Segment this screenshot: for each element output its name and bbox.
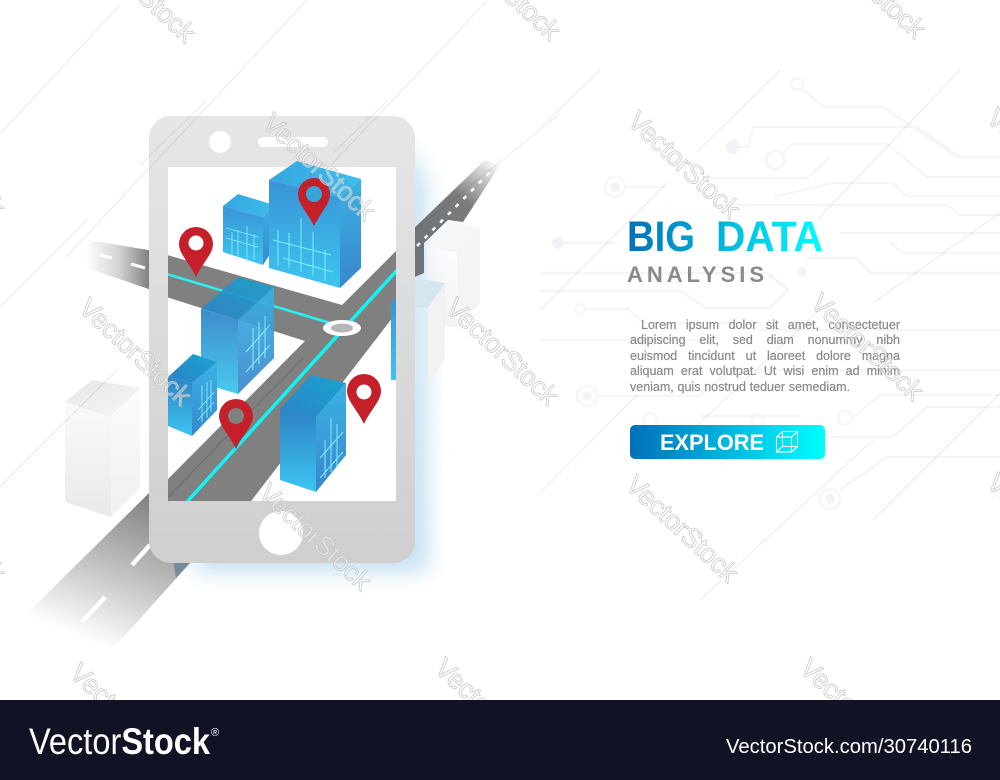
- body paragraph: Lorem ipsum dolor sit amet, consectetuer: [641, 318, 900, 332]
- watermark overlay: VectorStock: [805, 287, 930, 407]
- building: small rear: [223, 194, 274, 265]
- phone body: [149, 116, 415, 563]
- city map on screen: [160, 161, 400, 505]
- building: ghost right rear: [427, 222, 480, 327]
- pin: top building: [298, 178, 330, 226]
- road: upper right with dashes: [410, 160, 500, 279]
- building: middle: [201, 277, 274, 394]
- body paragraph: aliquam erat volutpat. Ut wisi enim ad minim: [630, 364, 900, 378]
- watermark overlay: VectorStock: [620, 469, 745, 589]
- pin: right: [347, 374, 381, 424]
- heading: analysis: ANALYSIS: [627, 262, 764, 287]
- pin: centre road: [219, 399, 253, 449]
- pin: left road: [179, 227, 213, 277]
- road: lower left: [0, 493, 200, 650]
- body paragraph: adipiscing elit, sed diam nonummy nibh: [630, 333, 900, 347]
- screen: [168, 167, 396, 501]
- building: front left: [168, 354, 217, 436]
- roads on screen: [160, 247, 400, 505]
- building: ghost right front: [410, 277, 445, 385]
- main illustration canvas: [34, 77, 1000, 642]
- button label: EXPLORE: [660, 430, 764, 455]
- footer image id: VectorStock.com/30740116: [726, 736, 972, 758]
- watermark overlay: VectorStock: [257, 107, 382, 227]
- building: clipped right edge: [391, 298, 396, 380]
- watermark overlay: VectorStock: [622, 105, 747, 225]
- camera: [209, 131, 231, 153]
- heading: big data: [627, 213, 823, 261]
- building: tall rear: [269, 161, 361, 288]
- body paragraph: euismod tincidunt ut laoreet dolore magna: [630, 349, 900, 363]
- watermark overlay: VectorStock: [253, 477, 378, 597]
- heading: big data: BIG: [627, 213, 695, 261]
- phone blue shadow: [195, 135, 428, 572]
- registered mark: ®: [211, 727, 219, 739]
- building: front right: [280, 375, 346, 492]
- watermark overlay: VectorStock: [440, 292, 565, 412]
- speaker: [258, 137, 328, 147]
- body paragraph: veniam, quis nostrud teduer semediam.: [630, 380, 850, 394]
- building: ghost left: [65, 380, 140, 517]
- footer bar: [0, 700, 1000, 780]
- icon: cube: [776, 432, 798, 452]
- body paragraph: [630, 318, 900, 394]
- watermark overlay: VectorStock: [73, 292, 198, 412]
- heading: big data: DATA: [716, 213, 823, 261]
- map junction marker: [323, 320, 361, 336]
- home button: [259, 511, 303, 555]
- phone: [149, 116, 415, 563]
- explore button: [630, 425, 825, 459]
- watermark overlay: VectorStock: [794, 652, 919, 772]
- footer logo: VectorStock: [29, 721, 210, 762]
- circuit board background: [540, 78, 1000, 509]
- watermark overlay: VectorStock: [64, 657, 189, 777]
- watermark overlay: VectorStock: [429, 652, 554, 772]
- road: upper left: [65, 236, 160, 293]
